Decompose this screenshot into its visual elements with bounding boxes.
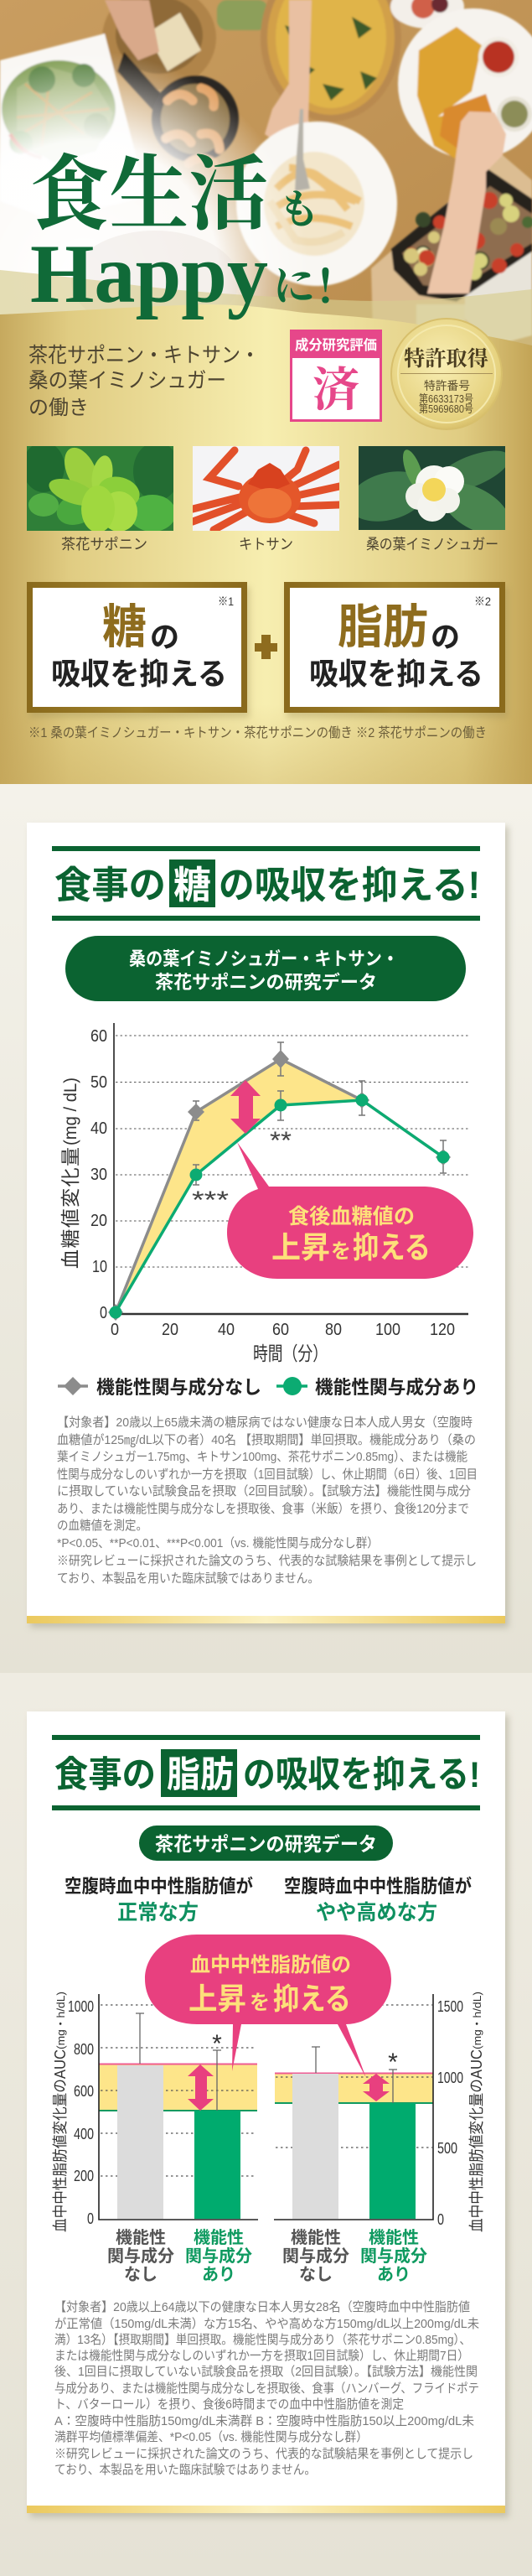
study notes	[54, 2300, 479, 2477]
difference arrow	[188, 2064, 214, 2111]
title exclamation: ！	[314, 262, 359, 313]
fat kanji: 脂肪	[338, 600, 428, 653]
legend control label: 機能性関与成分なし	[96, 1377, 261, 1398]
control bar	[117, 2065, 163, 2219]
y axis	[99, 1994, 258, 2220]
data pill	[65, 936, 466, 1001]
right treatment label: あり	[377, 2265, 411, 2284]
x tick labels: 100	[375, 1321, 400, 1339]
x tick labels: 20	[162, 1321, 178, 1339]
error bars	[136, 2013, 221, 2111]
bar labels	[107, 2228, 427, 2284]
treatment line	[116, 1100, 443, 1312]
subhead right	[284, 1876, 472, 1924]
right treatment label: 関与成分	[360, 2246, 427, 2266]
left axis title	[52, 1992, 69, 2232]
heading part 2: の吸収を抑える!	[219, 864, 480, 906]
caption: iminosugar: 桑の葉イミノシュガー	[366, 536, 498, 553]
box: sugar absorption	[29, 585, 250, 718]
y tick labels: 20	[90, 1212, 107, 1230]
legend	[58, 1377, 478, 1398]
study notes: あり、または機能性関与成分なしを摂取後、食事（米飯）を摂り、食後120分まで	[57, 1502, 469, 1516]
right control label: 機能性	[291, 2228, 341, 2247]
treatment level line	[275, 2102, 433, 2104]
heading	[54, 1749, 480, 1797]
heading rule bottom	[52, 1805, 480, 1810]
study notes: 【対象者】20歳以上64歳以下の健康な日本人男女28名（空腹時血中中性脂肪値	[54, 2300, 470, 2314]
patent heading: 特許取得	[404, 347, 488, 371]
treatment bar	[194, 2111, 240, 2219]
photo: snow crab	[193, 446, 339, 531]
tick labels: 500	[437, 2140, 457, 2157]
callout line 2: 抑える	[273, 1981, 351, 2016]
study notes: ト、バターロール）を摂り、食後6時間までの血中中性脂肪値を測定	[54, 2397, 404, 2412]
right control label: 関与成分	[282, 2246, 349, 2266]
tick labels: 600	[74, 2083, 94, 2100]
y tick labels: 30	[90, 1166, 107, 1184]
study notes: が正常値（150mg/dL未満）な方15名、やや高めな方150mg/dL以上200mg/dL未	[54, 2317, 479, 2331]
significance mark: *	[388, 2049, 398, 2076]
tick labels: 200	[74, 2168, 94, 2184]
y tick labels	[90, 1027, 107, 1322]
fat no: の	[431, 621, 460, 654]
callout line 1: 食後血糖値の	[288, 1205, 415, 1228]
right axis title	[468, 1992, 485, 2232]
callout: suppress triglycerides	[145, 1935, 391, 2078]
patent number 2: 第5969680号	[419, 402, 473, 415]
x tick labels: 40	[218, 1321, 235, 1339]
heading highlight box	[169, 860, 215, 907]
band gridline	[101, 2090, 256, 2091]
control markers	[108, 1050, 451, 1321]
study notes: A：空腹時中性脂肪150mg/dL未満群 B：空腹時中性脂肪150以上200mg/dL未	[54, 2414, 474, 2428]
subhead left line 1: 空腹時血中中性脂肪値が	[65, 1876, 253, 1897]
treatment level line	[99, 2110, 257, 2111]
study notes: 与成分あり、または機能性関与成分なしを摂取後、食事（ハンバーグ、フライドポテ	[54, 2381, 479, 2396]
study notes: 満群平均値標準偏差、*P<0.05（vs. 機能性関与成分なし群）	[54, 2430, 368, 2444]
significance mark: *	[212, 2030, 222, 2058]
y tick labels: 10	[92, 1258, 107, 1276]
badge: research evaluation	[290, 330, 382, 421]
card gold strip	[27, 2506, 505, 2513]
pill line 1: 桑の葉イミノシュガー・キトサン・	[129, 948, 399, 969]
study notes: ※研究レビューに採択された論文のうち、代表的な試験結果を事例として提示し	[57, 1554, 477, 1568]
left axis title main: 血中中性脂肪値変化量のAUC	[52, 2049, 69, 2232]
right treatment label	[360, 2228, 427, 2284]
heading part 2: の吸収を抑える!	[243, 1755, 480, 1795]
title small ni: に	[273, 262, 315, 309]
error bars	[312, 2047, 397, 2103]
study notes	[57, 1415, 478, 1586]
y axis	[113, 1023, 115, 1315]
bar chart right: high group	[274, 1994, 463, 2228]
study notes: 後、1回目に摂取していない試験食品を摂取（2回目試験）。【試験方法】機能性関	[54, 2365, 478, 2379]
error bars	[193, 1042, 447, 1185]
panel: fat data card	[27, 1711, 509, 2517]
patent number 1: 第6633173号	[419, 392, 473, 405]
bar chart left: normal group	[68, 1994, 258, 2227]
tick labels: 0	[437, 2211, 444, 2228]
tick labels: 1500	[437, 1998, 463, 2015]
page background bottom section	[0, 1673, 532, 2576]
right axis title main: 血中中性脂肪値変化量のAUC	[468, 2049, 485, 2232]
study notes: に摂取していない試験食品を摂取（2回目試験）。【試験方法】機能性関与成分	[57, 1484, 471, 1498]
photo: tea flower	[359, 446, 505, 530]
significance marks triple: ***	[192, 1187, 229, 1214]
callout line 2: 上昇	[271, 1230, 330, 1265]
sugar kanji: 糖	[102, 600, 147, 653]
fat note mark: ※2	[474, 595, 491, 608]
right axis title unit: (mg・h/dL)	[471, 1992, 483, 2049]
left control label: 関与成分	[107, 2246, 174, 2266]
callout line 2: 抑える	[353, 1230, 431, 1265]
sugar no: の	[150, 621, 179, 654]
study notes: 性関与成分なしのいずれか一方を摂取（1回目試験）し、休止期間（6日）後、1回目	[57, 1467, 478, 1482]
right treatment label: 機能性	[369, 2228, 419, 2247]
tick labels: 1000	[437, 2070, 463, 2086]
left treatment label: あり	[202, 2265, 235, 2284]
heading highlight word: 脂肪	[167, 1755, 234, 1795]
gold hero panel	[0, 304, 532, 784]
y tick labels: 0	[100, 1304, 107, 1322]
plus sign	[255, 635, 277, 659]
callout line 2: を	[250, 1992, 270, 2014]
left treatment label: 機能性	[194, 2228, 244, 2247]
pale translucent gold wave	[0, 270, 532, 361]
subhead right line 1: 空腹時血中中性脂肪値が	[284, 1876, 472, 1897]
study notes: 葉イミノシュガー1.75mg、キトサン100mg、茶花サポニン0.85mg）、または機能	[57, 1450, 467, 1464]
study notes: 満）13名）【摂取期間】単回摂取。機能性関与成分あり（茶花サポニン0.85mg）、	[54, 2333, 471, 2347]
ingredient heading line 3: の働き	[28, 397, 89, 419]
x axis title: 時間（分）	[253, 1343, 328, 1364]
callout line 2	[271, 1230, 431, 1265]
difference band	[99, 2064, 257, 2111]
callout line 2	[189, 1981, 351, 2016]
heading	[54, 860, 480, 907]
band gridline	[276, 2076, 432, 2078]
heading highlight word: 糖	[173, 864, 211, 906]
panel: sugar data card	[27, 823, 509, 1628]
subhead left	[65, 1876, 253, 1924]
right control label	[282, 2228, 349, 2284]
hero food photo	[0, 0, 532, 386]
box: fat absorption	[287, 585, 508, 718]
y axis title kanji: 血糖値変化量	[59, 1147, 81, 1269]
heading part 1: 食事の	[54, 1755, 156, 1795]
callout line 2: を	[331, 1240, 351, 1263]
reference level line	[275, 2073, 433, 2075]
left axis title unit: (mg・h/dL)	[54, 1992, 67, 2049]
gridlines	[101, 2005, 256, 2176]
left control label: なし	[124, 2265, 158, 2284]
significance marks double: **	[270, 1127, 292, 1155]
y axis title unit: (mg / dL)	[61, 1078, 80, 1145]
line chart: blood glucose	[59, 1023, 468, 1364]
legend treatment label: 機能性関与成分あり	[315, 1377, 478, 1398]
subhead right line 2: やや高めな方	[316, 1901, 437, 1924]
legend control diamond	[64, 1377, 82, 1395]
badge label: 成分研究評価	[295, 336, 377, 353]
subhead left line 2: 正常な方	[117, 1901, 199, 1924]
x tick labels: 80	[325, 1321, 342, 1339]
callout: suppress glucose	[227, 1142, 473, 1279]
legend control key	[58, 1384, 88, 1388]
data pill	[139, 1826, 393, 1861]
left control label	[107, 2228, 174, 2284]
badge: patent medal	[391, 319, 502, 429]
study notes: の血糖値を測定。	[57, 1519, 147, 1533]
x tick labels: 0	[111, 1321, 119, 1339]
heading highlight box	[161, 1749, 237, 1797]
hero footnote: ※1 桑の葉イミノシュガー・キトサン・茶花サポニンの働き ※2 茶花サポニンの働き	[28, 725, 487, 740]
heading rule top	[52, 846, 480, 851]
treatment markers	[109, 1093, 449, 1318]
x tick labels	[111, 1321, 455, 1339]
left control label: 機能性	[116, 2228, 166, 2247]
title small mo: も	[279, 188, 319, 232]
legend treatment circle	[283, 1377, 302, 1395]
y tick labels: 60	[90, 1027, 107, 1046]
sugar note mark: ※1	[218, 595, 234, 608]
pill label: 茶花サポニンの研究データ	[155, 1833, 377, 1855]
control line	[116, 1059, 443, 1312]
study notes: 血糖値が125㎎/dL以下の者）40名 【摂取期間】単回摂取。機能成分あり（桑の	[57, 1433, 476, 1447]
title line 1: 食生活	[30, 150, 268, 241]
tick labels	[68, 1998, 94, 2227]
left treatment label	[185, 2228, 252, 2284]
caption: chitosan: キトサン	[239, 536, 293, 553]
tick labels: 400	[74, 2126, 94, 2142]
study notes: 【対象者】20歳以上65歳未満の糖尿病ではない健康な日本人成人男女（空腹時	[57, 1415, 473, 1430]
pill line 2: 茶花サポニンの研究データ	[155, 972, 377, 993]
caption: saponin: 茶花サポニン	[61, 536, 147, 553]
right axis	[274, 1994, 433, 2220]
photo: mulberry leaves	[27, 446, 173, 531]
study notes: ており、本製品を用いた臨床試験ではありません。	[57, 1571, 319, 1586]
legend treatment key	[276, 1384, 307, 1388]
difference band	[275, 2074, 433, 2103]
study notes: または機能性関与成分なしのいずれか一方を摂取1回目試験）し、休止期間7日）	[54, 2349, 469, 2363]
tick labels: 0	[87, 2210, 94, 2227]
treatment bar	[369, 2103, 416, 2219]
sugar phrase: 吸収を抑える	[51, 657, 227, 691]
ingredient heading	[28, 344, 260, 419]
difference arrow	[230, 1080, 261, 1134]
heading part 1: 食事の	[54, 864, 166, 906]
title line 2 Happy: Happy	[30, 227, 268, 320]
callout line 1: 血中中性脂肪値の	[190, 1954, 351, 1976]
ingredient heading line 1: 茶花サポニン・キトサン・	[28, 344, 260, 367]
difference arrow	[363, 2074, 390, 2101]
patent label: 特許番号	[424, 379, 470, 392]
y tick labels: 40	[90, 1119, 107, 1138]
study notes: ており、本製品を用いた臨床試験ではありません。	[54, 2463, 316, 2477]
gridlines	[276, 2005, 432, 2148]
left treatment label: 関与成分	[185, 2246, 252, 2266]
x tick labels: 60	[272, 1321, 289, 1339]
card gold strip	[27, 1616, 505, 1623]
hero title	[30, 150, 359, 320]
ingredient heading line 2: 桑の葉イミノシュガー	[28, 369, 226, 392]
x tick labels: 120	[430, 1321, 455, 1339]
tick labels: 800	[74, 2041, 94, 2058]
y axis title	[59, 1078, 81, 1269]
page background lower section	[0, 784, 532, 1673]
heading rule top	[52, 1735, 480, 1740]
control bar	[292, 2074, 338, 2219]
study notes: ※研究レビューに採択された論文のうち、代表的な試験結果を事例として提示し	[54, 2447, 473, 2461]
y tick labels: 50	[90, 1073, 107, 1092]
right control label: なし	[299, 2265, 333, 2284]
study notes: *P<0.05、**P<0.01、***P<0.001（vs. 機能性関与成分なし群）	[57, 1536, 379, 1550]
x axis	[114, 1313, 468, 1315]
heading rule bottom	[52, 916, 480, 921]
tick labels	[437, 1998, 463, 2228]
gold panel bottom shading	[0, 704, 532, 784]
reference level line	[99, 2063, 257, 2064]
difference area	[116, 1059, 362, 1312]
gridlines	[116, 1036, 468, 1267]
callout line 2: 上昇	[189, 1981, 246, 2016]
badge kanji: 済	[312, 365, 359, 417]
fat phrase: 吸収を抑える	[309, 657, 483, 691]
tick labels: 1000	[68, 1998, 94, 2015]
